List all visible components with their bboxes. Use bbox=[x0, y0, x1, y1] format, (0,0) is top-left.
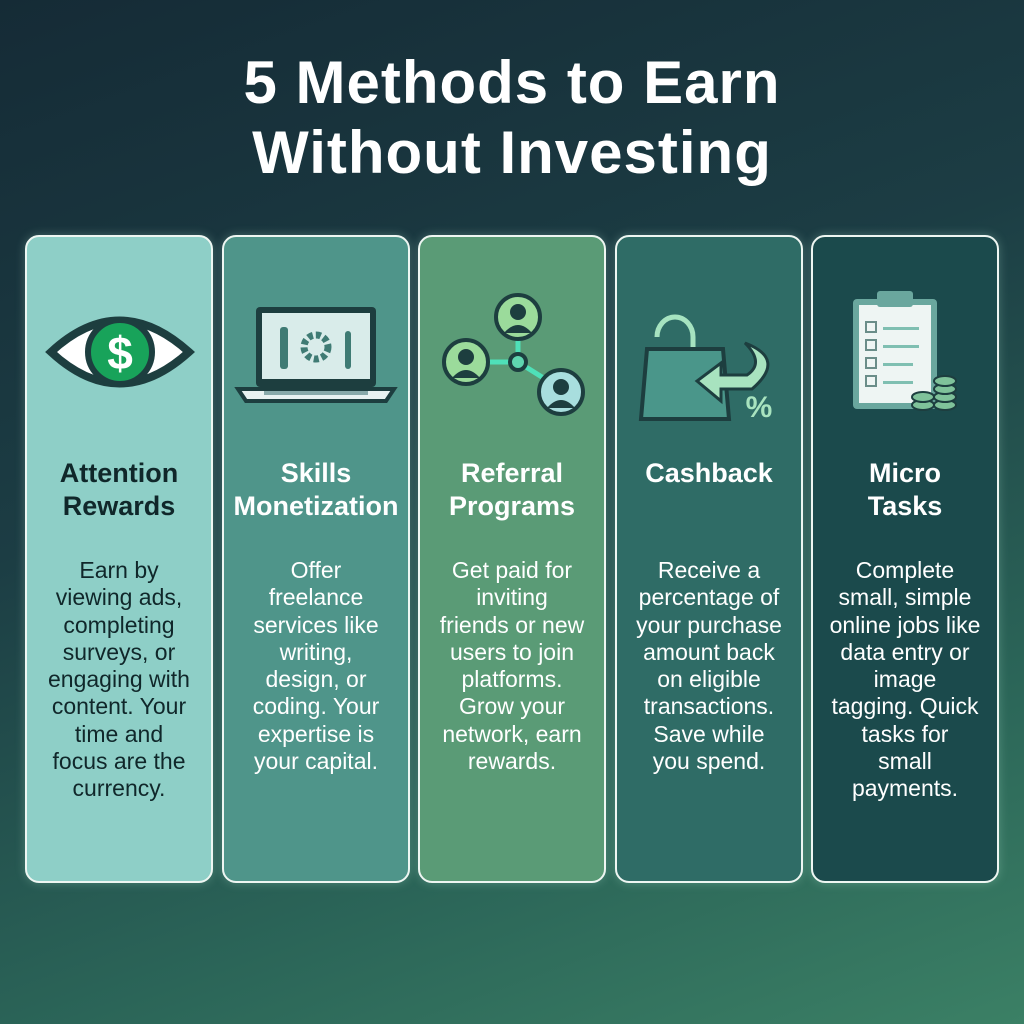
text: services like bbox=[253, 612, 379, 638]
heading bbox=[868, 458, 942, 521]
text: Save while bbox=[653, 721, 765, 747]
icon: laptop with tools bbox=[234, 307, 398, 403]
text: users to join bbox=[450, 639, 574, 665]
title: 5 Methods to Earn bbox=[243, 49, 781, 116]
heading: Referral bbox=[461, 458, 563, 488]
text: you spend. bbox=[653, 748, 765, 774]
panel: cashback bbox=[615, 235, 803, 883]
text bbox=[830, 557, 980, 801]
text: online jobs like bbox=[830, 612, 980, 638]
icon: network of people bbox=[442, 293, 585, 416]
heading bbox=[234, 458, 398, 521]
text: design, or bbox=[265, 666, 366, 692]
panel: attention rewards bbox=[25, 235, 213, 883]
heading: Micro bbox=[869, 458, 941, 488]
text: network, earn bbox=[442, 721, 582, 747]
icon: eye with dollar: $ bbox=[107, 327, 133, 379]
text: amount back bbox=[643, 639, 775, 665]
text: rewards. bbox=[468, 748, 556, 774]
text: inviting bbox=[476, 584, 548, 610]
heading: Rewards bbox=[63, 491, 175, 521]
panel: referral programs bbox=[418, 235, 606, 883]
text: platforms. bbox=[462, 666, 562, 692]
text: small bbox=[878, 748, 932, 774]
text: tasks for bbox=[862, 721, 948, 747]
text bbox=[253, 557, 379, 774]
heading: Cashback bbox=[645, 458, 773, 488]
text: content. Your bbox=[52, 693, 186, 719]
text: small, simple bbox=[839, 584, 971, 610]
text: freelance bbox=[269, 584, 363, 610]
heading: Tasks bbox=[868, 491, 942, 521]
text: friends or new bbox=[440, 612, 584, 638]
text: Earn by bbox=[79, 557, 159, 583]
text: focus are the bbox=[53, 748, 185, 774]
text: transactions. bbox=[644, 693, 774, 719]
icon: bag with arrow: % bbox=[746, 391, 772, 424]
text: percentage of bbox=[639, 584, 779, 610]
text bbox=[636, 557, 782, 774]
text: expertise is bbox=[258, 721, 374, 747]
text: engaging with bbox=[48, 666, 190, 692]
text: your purchase bbox=[636, 612, 782, 638]
title bbox=[243, 49, 781, 186]
text: completing bbox=[63, 612, 175, 638]
text: data entry or bbox=[840, 639, 970, 665]
text: coding. Your bbox=[253, 693, 379, 719]
panel: skills monetization bbox=[222, 235, 410, 883]
panel: micro tasks bbox=[811, 235, 999, 883]
text: image bbox=[874, 666, 936, 692]
heading: Attention bbox=[60, 458, 178, 488]
text: viewing ads, bbox=[56, 584, 182, 610]
text: writing, bbox=[280, 639, 352, 665]
text: Complete bbox=[856, 557, 954, 583]
text: Offer bbox=[291, 557, 341, 583]
text: time and bbox=[75, 721, 163, 747]
text: payments. bbox=[852, 775, 958, 801]
text bbox=[440, 557, 584, 774]
heading: Programs bbox=[449, 491, 575, 521]
heading bbox=[449, 458, 575, 521]
text: on eligible bbox=[657, 666, 761, 692]
text: Get paid for bbox=[452, 557, 572, 583]
text: surveys, or bbox=[63, 639, 175, 665]
text: your capital. bbox=[254, 748, 378, 774]
heading: Skills bbox=[281, 458, 351, 488]
icon: clipboard with coins bbox=[853, 291, 957, 411]
title: Without Investing bbox=[252, 119, 772, 186]
heading bbox=[60, 458, 178, 521]
text: Grow your bbox=[459, 693, 565, 719]
text: currency. bbox=[73, 775, 165, 801]
icon: eye with dollar bbox=[45, 316, 195, 388]
text: tagging. Quick bbox=[831, 693, 979, 719]
text: Receive a bbox=[658, 557, 760, 583]
text bbox=[48, 557, 190, 801]
icon: bag with arrow bbox=[638, 314, 772, 424]
heading: Monetization bbox=[234, 491, 398, 521]
